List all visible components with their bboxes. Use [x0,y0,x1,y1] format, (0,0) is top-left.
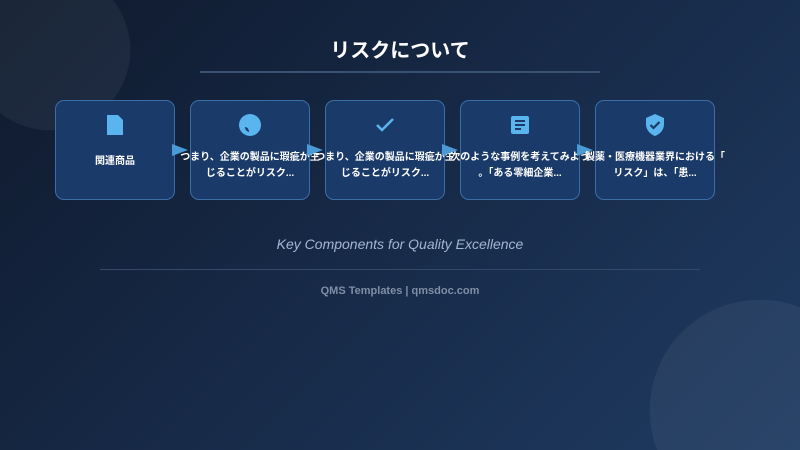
text: step 3: じることがリスク... [341,168,429,179]
text: step 2: じることがリスク... [206,168,294,179]
icon: document [107,115,123,135]
text: step 4 [450,151,590,179]
panel: step 3 [325,100,445,200]
panel: step 2 [190,100,310,200]
title: リスクについて [330,40,470,62]
arrow 3 [442,144,458,156]
text: step 5 [585,151,725,179]
arrow 4 [577,144,593,156]
icon: check [376,118,394,132]
text: step 5: 製薬・医療機器業界における「 [585,152,725,163]
panel: step 1 [55,100,175,200]
text: step 5: リスク」は、「患... [613,168,697,179]
icon: circle [239,114,261,136]
text: step 4: 次のような事例を考えてみよう [450,152,590,163]
icon: list [511,116,529,134]
text: step 2: つまり、企業の製品に瑕疵が生 [180,152,320,163]
text: step 3: つまり、企業の製品に瑕疵が生 [315,152,455,163]
subtitle: Key Components for Quality Excellence [277,236,523,252]
arrow 2 [307,144,323,156]
text: step 4: 。「ある零細企業... [478,168,562,179]
icon: shield [646,114,664,136]
panel: step 4 [460,100,580,200]
text: step 2 [180,151,320,179]
panel: step 5 [595,100,715,200]
text: step 3 [315,151,455,179]
text: step 1: 関連商品 [95,156,135,167]
footer: QMS Templates | qmsdoc.com [321,285,479,297]
arrow 1 [172,144,188,156]
